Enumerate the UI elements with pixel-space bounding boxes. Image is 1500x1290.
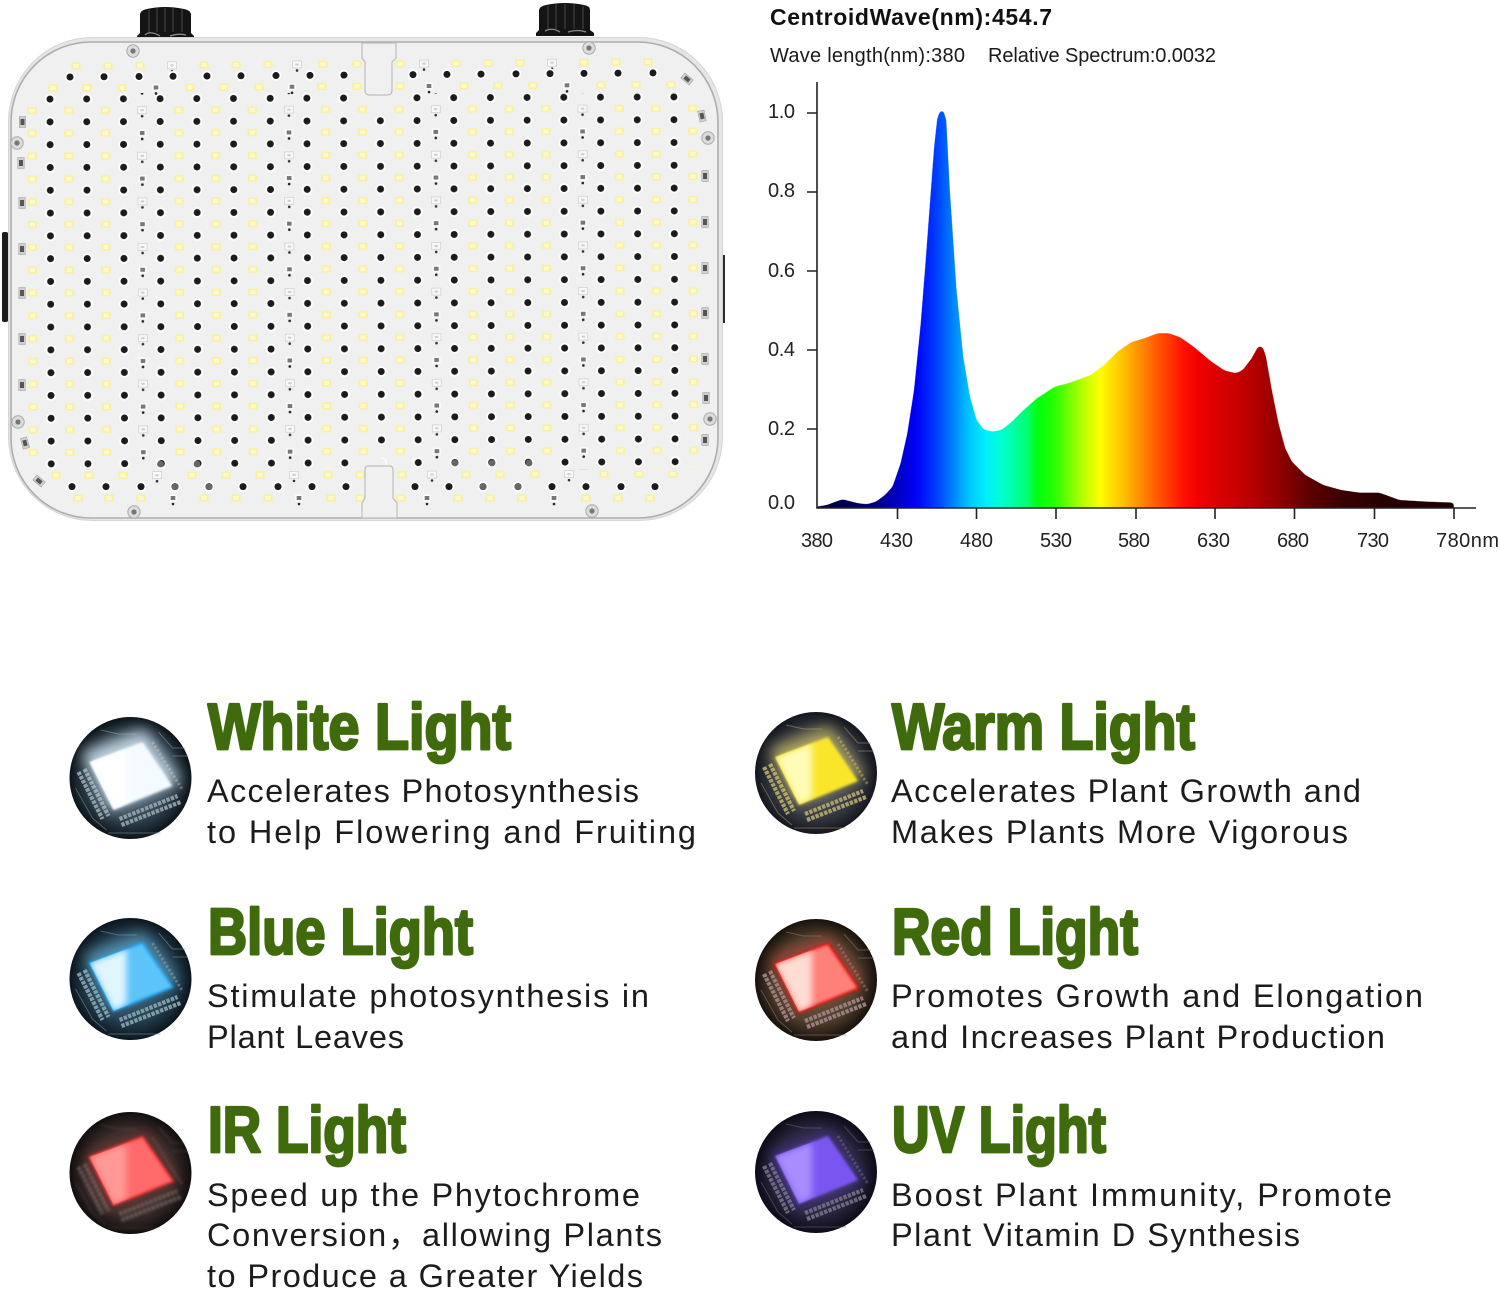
- y axis labels: 1.0: [768, 101, 795, 123]
- description: Accelerates Photosynthesis: [207, 773, 639, 809]
- feature: IR Light: [70, 1093, 662, 1290]
- description: [891, 773, 1361, 850]
- knob: right dimmer: [536, 3, 594, 36]
- clips: top and bottom notches: [362, 43, 397, 518]
- wavelength label: Wave length(nm):380: [770, 45, 965, 67]
- x axis labels: 730: [1357, 530, 1389, 552]
- y axis labels: 0.0: [768, 492, 795, 514]
- description: [207, 773, 696, 850]
- description: [207, 978, 649, 1055]
- x axis labels: 480: [960, 530, 993, 552]
- product: LED grow light panel: [2, 3, 725, 520]
- feature: White Light: [70, 690, 696, 850]
- y axis labels: [768, 101, 795, 514]
- knob: left dimmer: [137, 7, 194, 39]
- edge components: [18, 73, 709, 487]
- description: Speed up the Phytochrome: [207, 1177, 640, 1213]
- icon: blue chip: [70, 918, 192, 1040]
- heading: IR Light: [208, 1093, 406, 1166]
- centroid wave label: CentroidWave(nm):454.7: [770, 4, 1052, 30]
- side tab: left: [2, 232, 8, 322]
- description: [207, 1177, 662, 1290]
- x axis labels: 380: [801, 530, 833, 552]
- description: Plant Vitamin D Synthesis: [891, 1217, 1300, 1253]
- y axis labels: 0.6: [768, 260, 795, 282]
- heading: White Light: [208, 690, 511, 763]
- x axis labels: 580: [1118, 530, 1150, 552]
- relative spectrum label: Relative Spectrum:0.0032: [988, 45, 1216, 67]
- heading: UV Light: [892, 1093, 1106, 1166]
- LED rows: top: [48, 58, 676, 95]
- spectrum chart: [768, 82, 1499, 552]
- side tab: right: [721, 255, 725, 323]
- x axis labels: [801, 530, 1499, 552]
- description: and Increases Plant Production: [891, 1019, 1385, 1055]
- icon: white chip: [70, 717, 192, 839]
- description: Boost Plant Immunity, Promote: [891, 1177, 1392, 1213]
- x axis labels: 630: [1197, 530, 1230, 552]
- x axis labels: 780nm: [1436, 530, 1499, 552]
- icon: UV chip: [755, 1111, 877, 1233]
- y axis labels: 0.4: [768, 339, 795, 361]
- heading: Blue Light: [208, 895, 473, 968]
- heading: Red Light: [892, 895, 1138, 968]
- LED grid: [24, 93, 704, 470]
- description: Makes Plants More Vigorous: [891, 814, 1348, 850]
- description: Plant Leaves: [207, 1019, 404, 1055]
- icon: red chip: [755, 919, 877, 1041]
- icon: IR chip: [70, 1112, 192, 1234]
- feature: Warm Light: [755, 690, 1361, 850]
- description: Conversion，allowing Plants: [207, 1217, 662, 1253]
- screws: [11, 42, 716, 518]
- y axis labels: 0.2: [768, 418, 795, 440]
- LED rows: bottom: [51, 460, 678, 505]
- x axis labels: 680: [1277, 530, 1309, 552]
- axes and ticks: [807, 82, 1476, 519]
- y axis labels: 0.8: [768, 180, 795, 202]
- heading: Warm Light: [892, 690, 1195, 763]
- feature: Blue Light: [70, 906, 647, 1048]
- description: [891, 1177, 1392, 1253]
- spectrum header: [770, 4, 1216, 67]
- description: Accelerates Plant Growth and: [891, 773, 1361, 809]
- panel body: [8, 38, 722, 520]
- description: to Help Flowering and Fruiting: [207, 814, 696, 850]
- description: Stimulate photosynthesis in: [207, 978, 649, 1014]
- x axis labels: 530: [1040, 530, 1072, 552]
- spectrum curve: [809, 110, 1454, 523]
- x axis labels: 430: [880, 530, 913, 552]
- description: Promotes Growth and Elongation: [891, 978, 1423, 1014]
- icon: warm chip: [755, 712, 877, 834]
- feature: Red Light: [755, 906, 1421, 1048]
- description: [891, 978, 1423, 1055]
- feature: UV Light: [755, 1093, 1392, 1253]
